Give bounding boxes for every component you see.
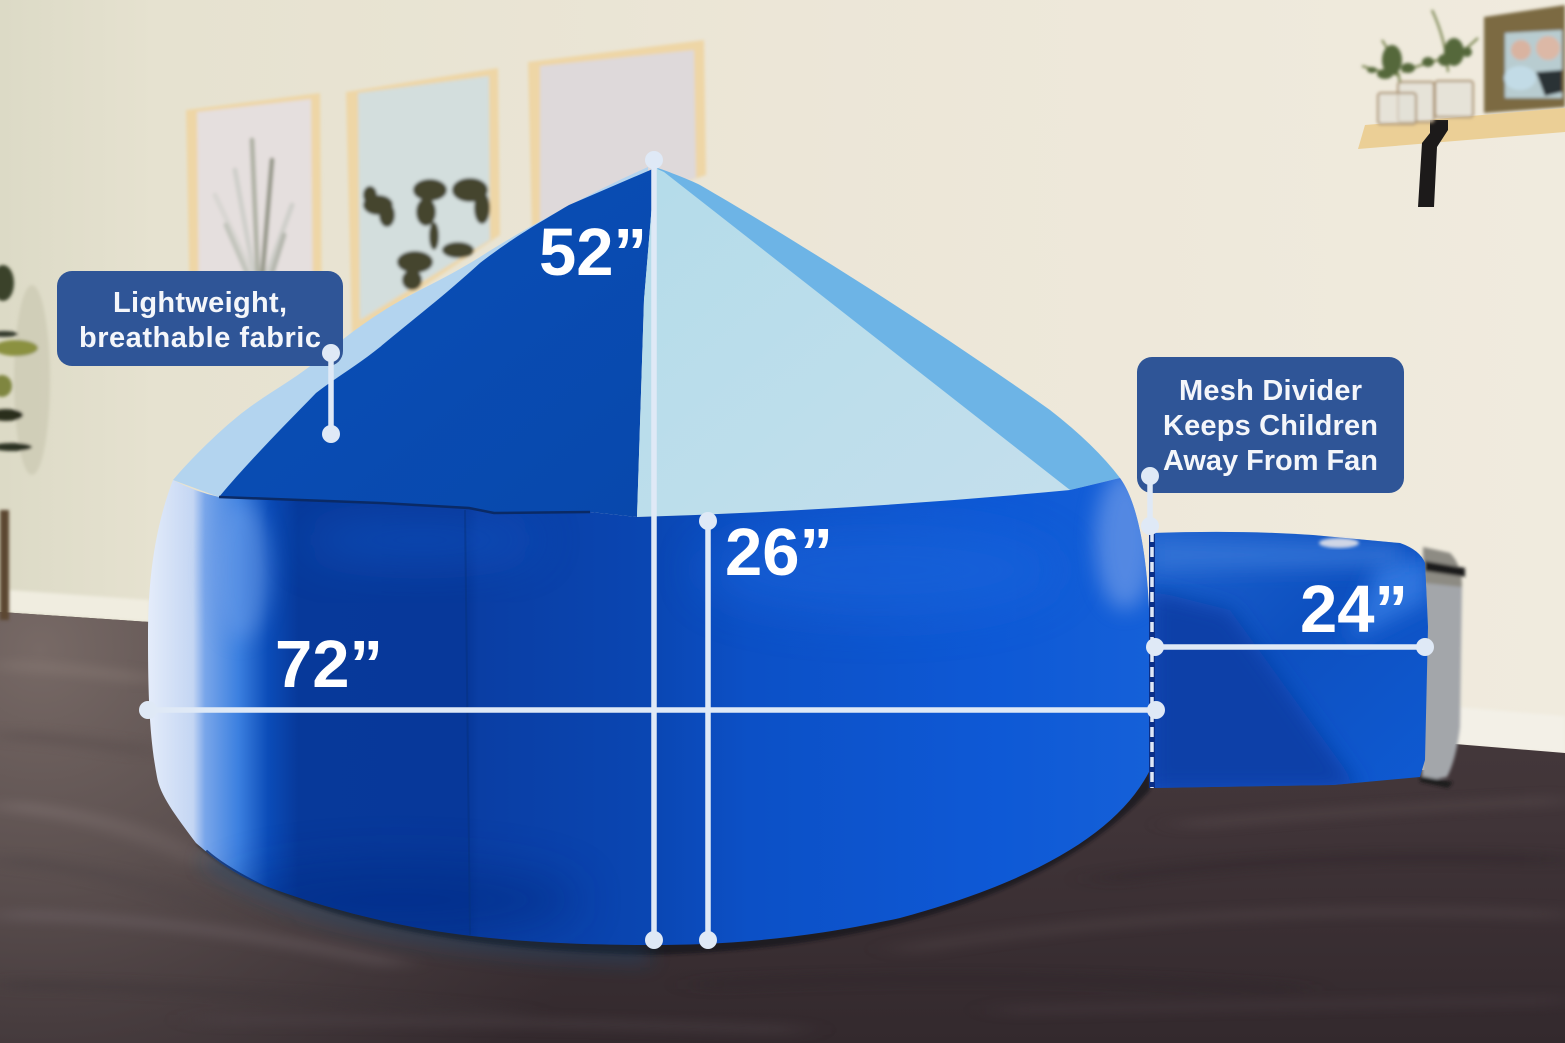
- shelf board: [1358, 108, 1565, 149]
- callout: mesh divider: Mesh Divider: [1179, 375, 1362, 407]
- pale roof panel: [637, 168, 1070, 517]
- dimension: 26 inch height: 26”: [725, 515, 833, 590]
- contact shadow: [196, 770, 1150, 955]
- callout: lightweight fabric: breathable fabric: [79, 322, 321, 354]
- dimension: 52 inch height: 52”: [539, 215, 647, 290]
- roof seam: [219, 497, 590, 513]
- shelf bracket: [1418, 120, 1448, 207]
- wall background: [0, 0, 1565, 760]
- shelf with decor: [1358, 5, 1565, 207]
- callout: lightweight fabric: [57, 271, 343, 443]
- light blue right roof panel: [650, 166, 1120, 490]
- fan strap: [1425, 561, 1465, 577]
- base drum: [148, 478, 1150, 945]
- glass jars: [1378, 81, 1473, 124]
- base shading: [205, 470, 1155, 950]
- callout: lightweight fabric: Lightweight,: [113, 287, 287, 319]
- photo frame: [1484, 5, 1565, 113]
- dimension: 52 inch height: [539, 151, 663, 949]
- dark blue roof panel: [219, 168, 655, 517]
- houseplant at left edge: [0, 265, 50, 620]
- dimension: 72 inch width: [139, 627, 1165, 719]
- framed picture middle: [346, 68, 500, 335]
- dimension: 24 inch width: [1146, 572, 1434, 656]
- sprigs: [1362, 10, 1478, 82]
- floor reflection: [205, 858, 650, 956]
- fan cover: [1150, 532, 1430, 790]
- dashed mesh divider line: [1149, 530, 1155, 788]
- wood floor: [0, 600, 1565, 1043]
- framed picture right: [528, 40, 706, 235]
- fan cover logo: [1319, 538, 1359, 548]
- inflatable fort: [148, 166, 1155, 956]
- callout: mesh divider: Keeps Children: [1163, 410, 1378, 442]
- baseboard: [8, 590, 1565, 753]
- light blue left roof strip: [173, 167, 648, 497]
- dimension: 26 inch height: [699, 512, 833, 949]
- framed picture left: [186, 93, 322, 310]
- dimension: 72 inch width: 72”: [275, 627, 383, 702]
- callout: mesh divider: [1137, 357, 1404, 535]
- dimension: 24 inch width: 24”: [1300, 572, 1408, 647]
- callout: mesh divider: Away From Fan: [1163, 445, 1378, 477]
- fan unit: [1420, 547, 1465, 788]
